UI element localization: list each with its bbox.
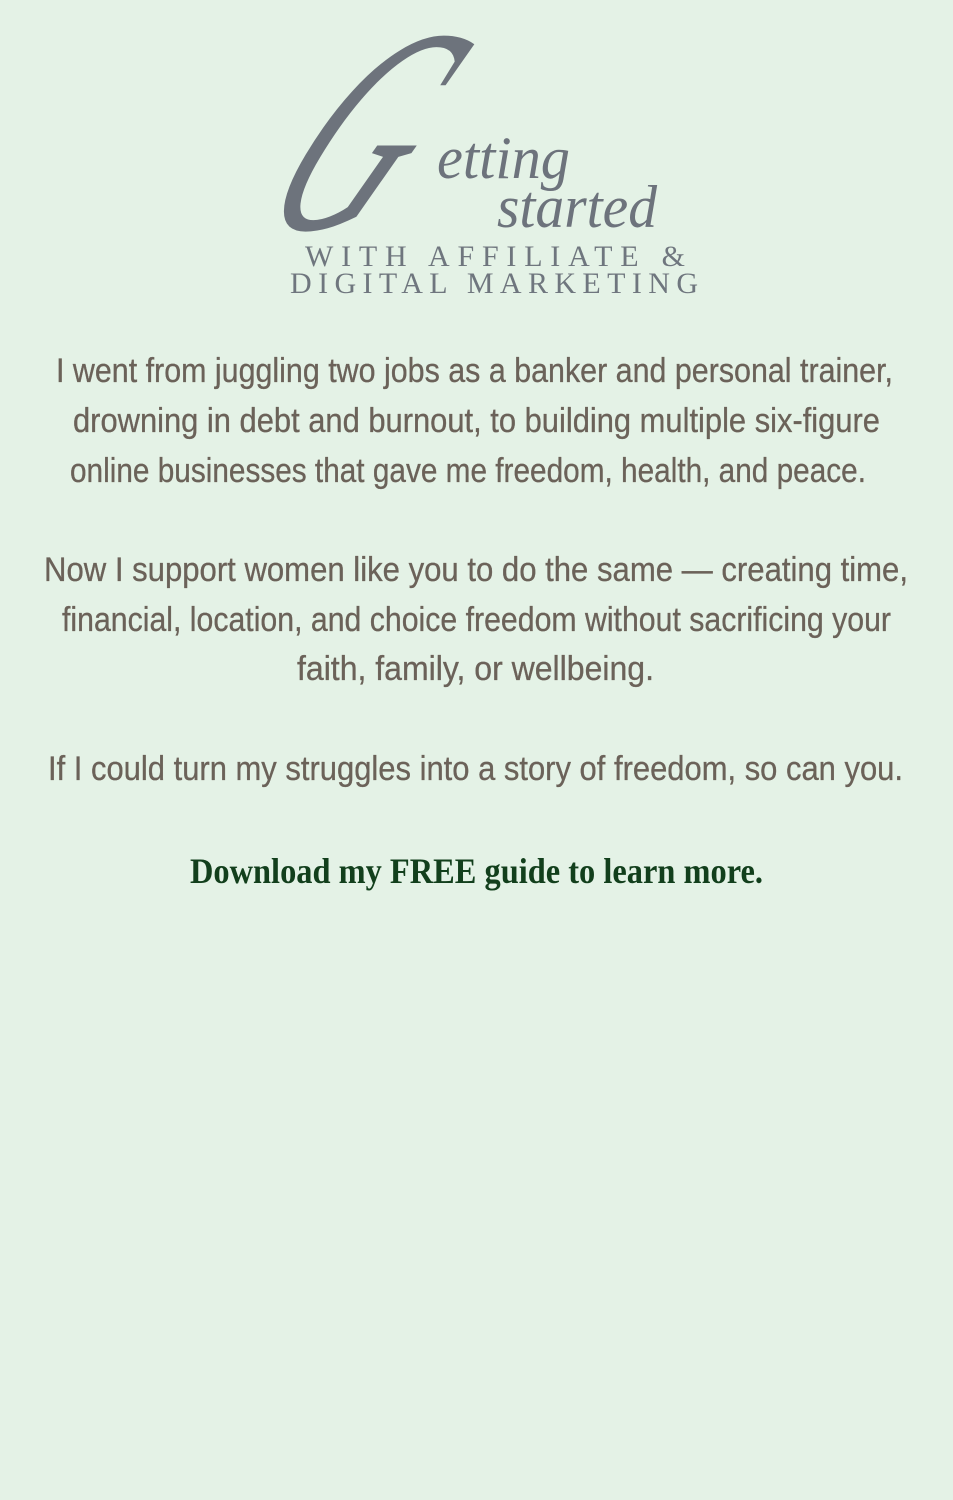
story text: second paragraph: faith, family, or wellbeing. [297, 650, 654, 688]
story text: first paragraph [56, 352, 893, 490]
subtitle: WITH AFFILIATE & [305, 240, 685, 273]
title block [214, 0, 698, 300]
story text: first paragraph: drowning in debt and burnout, to building multiple six-figure [73, 402, 880, 440]
title: Getting started: started [497, 174, 658, 240]
story text: first paragraph: online businesses that gave me freedom, health, and peace. [70, 452, 866, 490]
title: Getting started: etting [437, 125, 570, 191]
subtitle: DIGITAL MARKETING [290, 267, 698, 300]
call to action: Download my FREE guide to learn more. [190, 851, 763, 891]
subtitle [290, 240, 698, 300]
story text: second paragraph [44, 551, 908, 688]
